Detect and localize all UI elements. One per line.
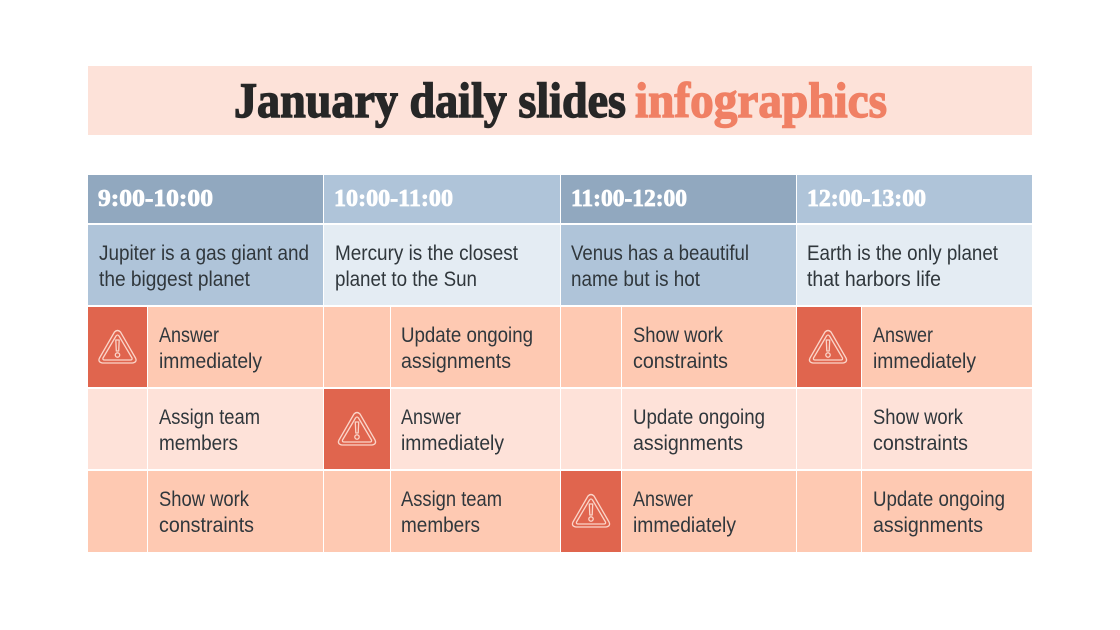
task row: assignments xyxy=(873,513,983,537)
description xyxy=(88,225,323,305)
task row: Assign team xyxy=(401,487,502,511)
time header: 9:00-10:00 xyxy=(98,186,213,212)
task row xyxy=(797,389,1032,469)
description: Venus has a beautiful xyxy=(571,241,749,265)
task row xyxy=(561,389,796,469)
title banner xyxy=(88,66,1032,135)
time header xyxy=(797,175,1032,223)
column: 9:00-10:00 xyxy=(88,175,323,552)
task row with alert: Answer xyxy=(159,323,219,347)
icon: warning triangle xyxy=(338,412,376,445)
task row with alert xyxy=(797,307,1032,387)
description: that harbors life xyxy=(807,267,941,291)
task row: Update ongoing xyxy=(401,323,533,347)
task row: constraints xyxy=(159,513,254,537)
task row: constraints xyxy=(873,431,968,455)
task row: Update ongoing xyxy=(633,405,765,429)
icon: warning triangle xyxy=(572,494,610,527)
description xyxy=(561,225,796,305)
time header: 11:00-12:00 xyxy=(571,186,687,212)
time header: 10:00-11:00 xyxy=(334,186,453,212)
description: Jupiter is a gas giant and xyxy=(99,241,309,265)
time header xyxy=(324,175,560,223)
title text accent: infographics xyxy=(635,72,887,128)
task row: Show work xyxy=(633,323,723,347)
icon: warning triangle xyxy=(809,330,847,363)
task row xyxy=(88,471,323,552)
column: 10:00-11:00 xyxy=(324,175,560,552)
column: 11:00-12:00 xyxy=(561,175,796,552)
task row with alert: immediately xyxy=(633,513,736,537)
task row with alert: immediately xyxy=(159,349,262,373)
description xyxy=(797,225,1032,305)
description: Earth is the only planet xyxy=(807,241,998,265)
task row with alert: immediately xyxy=(401,431,504,455)
task row: Show work xyxy=(873,405,963,429)
time header xyxy=(561,175,796,223)
task row with alert: immediately xyxy=(873,349,976,373)
task row with alert: Answer xyxy=(633,487,693,511)
task row xyxy=(797,471,1032,552)
task row xyxy=(324,307,560,387)
task row with alert xyxy=(561,471,796,552)
icon: warning triangle xyxy=(99,330,136,363)
task row xyxy=(324,471,560,552)
task row with alert: Answer xyxy=(401,405,461,429)
title text dark: January daily slides xyxy=(234,72,626,128)
column: 12:00-13:00 xyxy=(797,175,1032,552)
description xyxy=(324,225,560,305)
task row: members xyxy=(401,513,480,537)
task row: Assign team xyxy=(159,405,260,429)
task row: members xyxy=(159,431,238,455)
task row xyxy=(88,389,323,469)
time header: 12:00-13:00 xyxy=(807,186,926,212)
description: planet to the Sun xyxy=(335,267,477,291)
description: the biggest planet xyxy=(99,267,250,291)
task row: Show work xyxy=(159,487,249,511)
task row with alert xyxy=(324,389,560,469)
description: name but is hot xyxy=(571,267,700,291)
description: Mercury is the closest xyxy=(335,241,518,265)
time header xyxy=(88,175,323,223)
task row xyxy=(561,307,796,387)
task row with alert xyxy=(88,307,323,387)
task row: Update ongoing xyxy=(873,487,1005,511)
task row with alert: Answer xyxy=(873,323,933,347)
task row: assignments xyxy=(633,431,743,455)
task row: assignments xyxy=(401,349,511,373)
task row: constraints xyxy=(633,349,728,373)
